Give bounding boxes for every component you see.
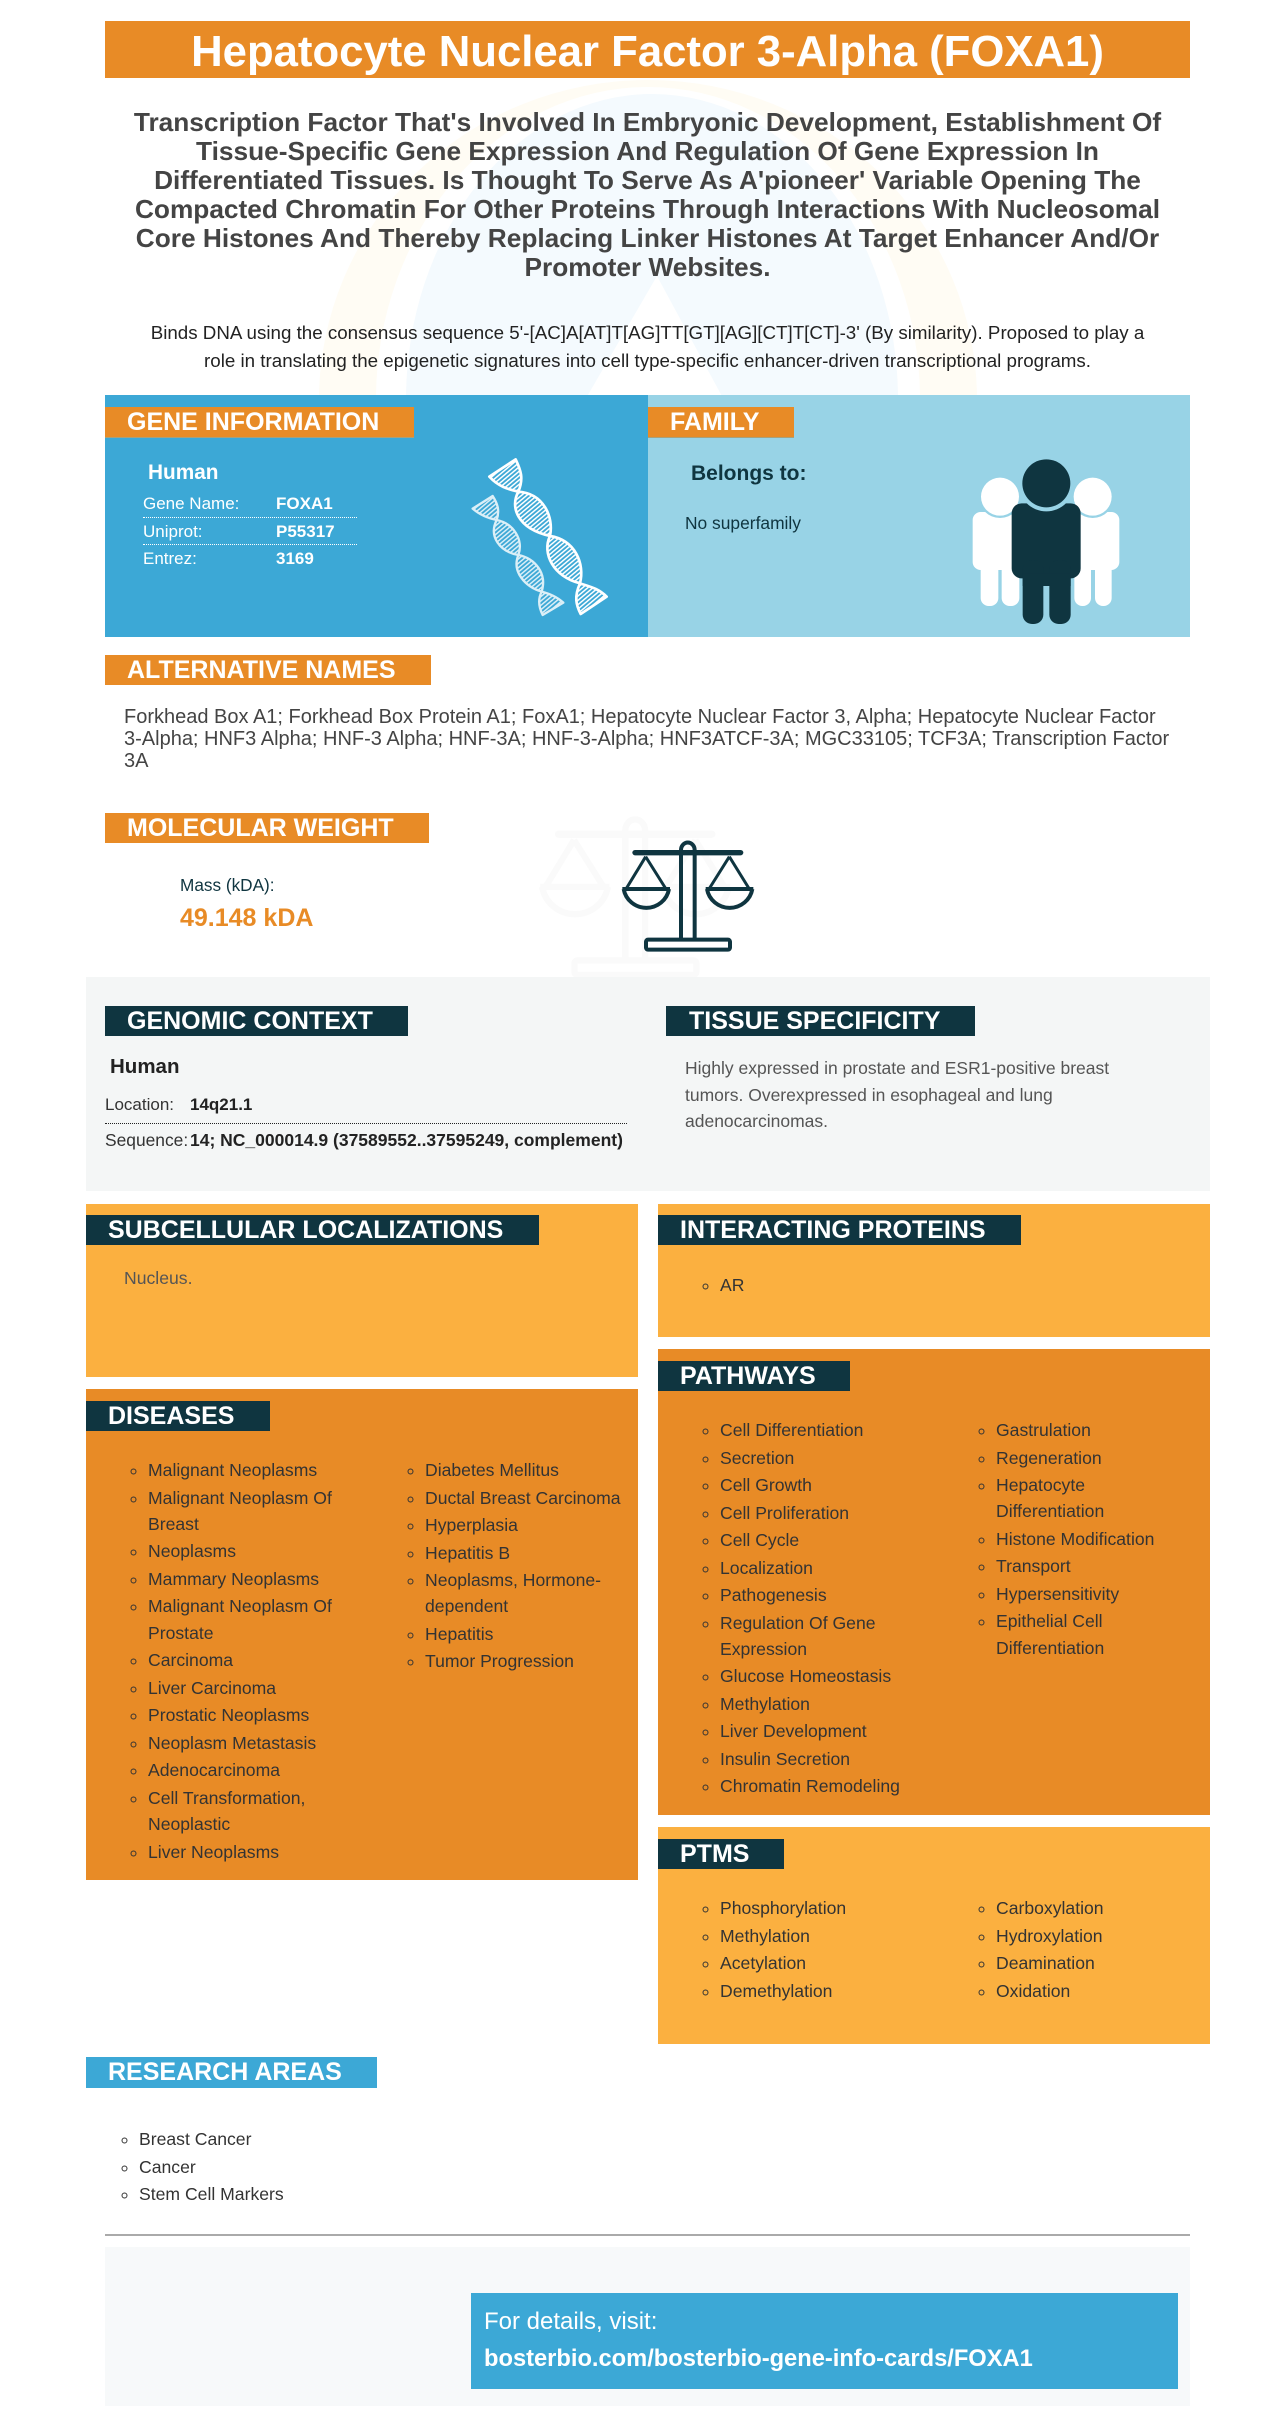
pathways list column 2: Histone Modification	[996, 1529, 1154, 1549]
pathways list column 2: Gastrulation	[996, 1420, 1091, 1440]
diseases list column 1: Prostatic Neoplasms	[148, 1705, 309, 1725]
gene name row: FOXA1	[276, 494, 333, 513]
icon: DNA helices	[471, 458, 608, 616]
diseases list column 1: Neoplasms	[148, 1541, 236, 1561]
pathways list column 2: Hepatocyte	[996, 1475, 1085, 1495]
diseases list column 2	[408, 1460, 621, 1671]
alternative names text: Forkhead Box A1; Forkhead Box Protein A1; FoxA1; Hepatocyte Nuclear Factor 3, Alpha; Hepatocyte Nuclear Factor	[124, 706, 1156, 728]
diseases list column 1: Malignant Neoplasms	[148, 1460, 317, 1480]
diseases list column 2: Ductal Breast Carcinoma	[425, 1488, 621, 1508]
subtitle summary: Compacted Chromatin For Other Proteins Through Interactions With Nucleosomal	[135, 194, 1160, 224]
PTMs list column 2	[978, 1898, 1104, 2000]
heading: PTMs	[658, 1839, 784, 1869]
panel: pathways	[658, 1349, 1210, 1815]
pathways list column 1: Expression	[720, 1639, 807, 1659]
details url: bosterbio.com/bosterbio-gene-info-cards/FOXA1	[484, 2346, 1033, 2372]
species label: Human	[148, 461, 218, 484]
diseases list column 2: Hepatitis	[425, 1624, 493, 1644]
PTMs list column 1: Demethylation	[720, 1980, 832, 2000]
pathways list column 1: Chromatin Remodeling	[720, 1776, 900, 1796]
heading: diseases	[86, 1401, 270, 1431]
diseases list column 1: Mammary Neoplasms	[148, 1569, 319, 1589]
diseases list column 1: Malignant Neoplasm Of	[148, 1488, 332, 1508]
heading: molecular weight: MOLECULAR WEIGHT	[127, 814, 394, 842]
PTMs list column 1	[702, 1898, 846, 2000]
diseases list column 1: Adenocarcinoma	[148, 1760, 280, 1780]
pathways list column 1: Pathogenesis	[720, 1585, 827, 1605]
panel: PTMs	[658, 1827, 1210, 2044]
icon: balance scale with ghost	[622, 840, 754, 952]
diseases list column 1: Breast	[148, 1514, 199, 1534]
localization text: Nucleus.	[124, 1268, 192, 1288]
pathways list column 2: Hypersensitivity	[996, 1584, 1119, 1604]
panel: interacting proteins	[658, 1204, 1210, 1337]
research areas list: Cancer	[139, 2156, 196, 2176]
pathways list column 1	[702, 1420, 900, 1796]
PTMs list column 2: Deamination	[996, 1953, 1095, 1973]
alternative names text: 3A	[124, 750, 148, 772]
diseases list column 2: Diabetes Mellitus	[425, 1460, 559, 1480]
pathways list column 1: Cell Differentiation	[720, 1420, 863, 1440]
tissue specificity text: Highly expressed in prostate and ESR1-positive breast	[685, 1058, 1109, 1078]
pathways list column 2	[978, 1420, 1154, 1658]
heading: pathways	[658, 1361, 850, 1391]
tissue specificity text: tumors. Overexpressed in esophageal and lung	[685, 1084, 1053, 1104]
pathways list column 1: Secretion	[720, 1448, 794, 1468]
entrez row: Entrez:	[143, 549, 197, 568]
belongs to label: Belongs to:	[691, 462, 806, 485]
function description	[151, 322, 1144, 371]
diseases list column 2: dependent	[425, 1596, 508, 1616]
heading: family: FAMILY	[670, 408, 759, 436]
uniprot row	[143, 521, 357, 545]
panel: diseases	[86, 1389, 638, 1880]
diseases list column 1	[130, 1460, 332, 1862]
species label: Human	[110, 1055, 179, 1078]
uniprot row: Uniprot:	[143, 522, 203, 541]
alternative names text: 3-Alpha; HNF3 Alpha; HNF-3 Alpha; HNF-3A; HNF-3-Alpha; HNF3ATCF-3A; MGC33105; TCF3A; Transcription Factor	[124, 728, 1169, 750]
pathways list column 1: Regulation Of Gene	[720, 1612, 876, 1632]
subtitle summary: Promoter Websites.	[524, 252, 771, 282]
function description: role in translating the epigenetic signatures into cell type-specific enhancer-driven transcriptional programs.	[204, 350, 1091, 371]
heading: diseases: DISEASES	[108, 1402, 234, 1430]
panel: family	[648, 395, 1190, 637]
subtitle summary: Tissue-Specific Gene Expression And Regulation Of Gene Expression In	[196, 136, 1099, 166]
PTMs list column 2: Hydroxylation	[996, 1926, 1103, 1946]
subtitle summary: Core Histones And Thereby Replacing Linker Histones At Target Enhancer And/Or	[136, 223, 1159, 253]
watermark: faint logo behind the summary	[319, 80, 977, 395]
PTMs list column 1: Methylation	[720, 1926, 810, 1946]
PTMs list column 1: Acetylation	[720, 1953, 806, 1973]
title: Hepatocyte Nuclear Factor 3-Alpha (FOXA1)	[191, 27, 1104, 76]
pathways list column 2: Regeneration	[996, 1448, 1102, 1468]
callout: details link	[471, 2293, 1178, 2389]
diseases list column 1: Carcinoma	[148, 1650, 233, 1670]
pathways list column 1: Cell Proliferation	[720, 1502, 849, 1522]
pathways list column 2: Differentiation	[996, 1638, 1104, 1658]
subtitle summary: Differentiated Tissues. Is Thought To Serve As A'pioneer' Variable Opening The	[154, 165, 1141, 195]
heading: family	[648, 407, 794, 437]
diseases list column 1: Prostate	[148, 1623, 214, 1643]
diseases list column 2: Neoplasms, Hormone-	[425, 1570, 601, 1590]
diseases list column 1: Neoplastic	[148, 1814, 230, 1834]
diseases list column 1: Neoplasm Metastasis	[148, 1733, 316, 1753]
mass label: Mass (kDA):	[180, 875, 275, 895]
location row: 14q21.1	[190, 1095, 252, 1114]
pathways list column 1: Localization	[720, 1558, 813, 1578]
family value: No superfamily	[685, 513, 801, 533]
heading: subcellular localizations: SUBCELLULAR LOCALIZATIONS	[108, 1216, 503, 1244]
research areas list: Breast Cancer	[139, 2129, 251, 2149]
location row	[105, 1094, 627, 1124]
panel: footer	[105, 2247, 1190, 2406]
location row: Location:	[105, 1095, 174, 1114]
icon: group of people	[972, 459, 1120, 624]
entrez row	[143, 549, 314, 568]
tissue specificity text: adenocarcinomas.	[685, 1111, 828, 1131]
diseases list column 1: Malignant Neoplasm Of	[148, 1596, 332, 1616]
pathways list column 1: Liver Development	[720, 1721, 867, 1741]
function description: Binds DNA using the consensus sequence 5'-[AC]A[AT]T[AG]TT[GT][AG][CT]T[CT]-3' (By similarity). Proposed to play a	[151, 322, 1144, 343]
alternative names text	[124, 706, 1169, 772]
diseases list column 1: Cell Transformation,	[148, 1788, 305, 1808]
interacting proteins list: AR	[720, 1275, 744, 1295]
subtitle summary: Transcription Factor That's Involved In Embryonic Development, Establishment Of	[134, 107, 1161, 137]
details label: For details, visit:	[484, 2308, 657, 2335]
heading: gene information: GENE INFORMATION	[127, 408, 379, 436]
panel: genomic context and tissue specificity	[86, 977, 1210, 1191]
sequence row: Sequence:	[105, 1130, 188, 1150]
uniprot row: P55317	[276, 522, 335, 541]
heading: PTMs: PTMS	[680, 1840, 749, 1868]
heading: genomic context: GENOMIC CONTEXT	[127, 1007, 373, 1035]
research areas list: Stem Cell Markers	[139, 2184, 284, 2204]
diseases list column 1: Liver Neoplasms	[148, 1842, 279, 1862]
panel: gene information	[105, 395, 648, 637]
mass value: 49.148 kDA	[180, 904, 313, 932]
pathways list column 1: Cell Cycle	[720, 1530, 799, 1550]
PTMs list column 2: Oxidation	[996, 1980, 1070, 2000]
pathways list column 2: Transport	[996, 1556, 1071, 1576]
heading: pathways: PATHWAYS	[680, 1362, 816, 1390]
gene name row: Gene Name:	[143, 494, 239, 513]
entrez row: 3169	[276, 549, 314, 568]
diseases list column 2: Hyperplasia	[425, 1515, 518, 1535]
tissue specificity text	[685, 1058, 1109, 1131]
diseases list column 1: Liver Carcinoma	[148, 1678, 276, 1698]
pathways list column 1: Methylation	[720, 1694, 810, 1714]
PTMs list column 1: Phosphorylation	[720, 1898, 846, 1918]
heading: interacting proteins: INTERACTING PROTEINS	[680, 1216, 986, 1244]
pathways list column 1: Cell Growth	[720, 1475, 812, 1495]
pathways list column 1: Insulin Secretion	[720, 1749, 850, 1769]
research areas list	[122, 2129, 284, 2204]
heading: tissue specificity: TISSUE SPECIFICITY	[689, 1007, 940, 1035]
diseases list column 2: Hepatitis B	[425, 1542, 510, 1562]
subtitle summary	[134, 107, 1162, 282]
gene name row	[143, 493, 357, 518]
diseases list column 2: Tumor Progression	[425, 1651, 574, 1671]
panel: subcellular localizations	[86, 1204, 638, 1377]
heading: research areas: RESEARCH AREAS	[108, 2058, 342, 2086]
pathways list column 1: Glucose Homeostasis	[720, 1666, 891, 1686]
PTMs list column 2: Carboxylation	[996, 1898, 1104, 1918]
pathways list column 2: Epithelial Cell	[996, 1611, 1103, 1631]
sequence row: 14; NC_000014.9 (37589552..37595249, complement)	[190, 1130, 623, 1150]
heading: alternative names: ALTERNATIVE NAMES	[127, 656, 396, 684]
pathways list column 2: Differentiation	[996, 1501, 1104, 1521]
